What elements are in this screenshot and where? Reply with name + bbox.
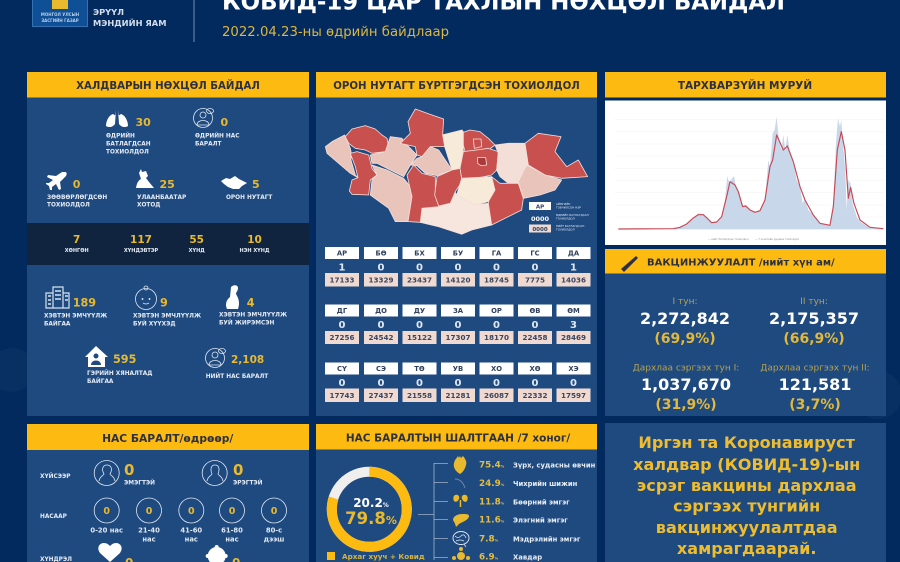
row: by age: 41-60 [180, 526, 202, 534]
cause: heart disease: 75.4% [479, 461, 505, 471]
province table row 3: ХӨ [529, 365, 541, 373]
province table row 1: 0 [416, 262, 423, 274]
stat: home monitored: 595 [113, 353, 136, 366]
stat: hospitalized children: ХЭВТЭН ЭМЧЛҮҮЛЖ [133, 314, 202, 320]
chart: epidemic curve [605, 100, 886, 245]
province table row 2: ОР [491, 307, 502, 315]
province table row 2: 0 [455, 320, 462, 331]
stat: hospitalized children: БУЙ ХҮҮХЭД [133, 319, 176, 327]
stat: daily deaths: ӨДРИЙН НАС [195, 132, 240, 140]
cause: heart disease [454, 456, 596, 474]
province table row 3: УВ [453, 365, 463, 373]
stat: Ulaanbaatar: ХОТОД [137, 202, 160, 208]
province table row 3: 21281 [445, 391, 471, 400]
province table row 3: 0 [339, 378, 346, 389]
map legend: ТОХИОЛДОЛ [555, 216, 575, 220]
stat: booster two [760, 364, 870, 413]
stat: imported cases: ТОХИОЛДОЛ [47, 202, 90, 208]
province table row 2: 0 [532, 320, 539, 331]
stat: Ulaanbaatar [136, 169, 187, 208]
stat: second dose: 2,175,357 [769, 309, 859, 328]
province table row 2: ӨМ [567, 307, 580, 315]
province table row 2: 28469 [561, 333, 586, 342]
map legend: ТОХИОЛДОЛ [555, 228, 575, 232]
province table row 2: 3 [570, 320, 577, 331]
cause: heart disease: Зүрх, судасны өвчин [513, 462, 596, 470]
ministry logo [32, 0, 194, 42]
province table row 2 [325, 304, 590, 344]
stat: second dose [769, 297, 859, 347]
province table row 2: ДУ [414, 307, 426, 315]
province table row 3: 26087 [484, 391, 509, 400]
panel: vaccination call to action: вакцинжуулалтдаа [656, 518, 838, 537]
map legend: АЙМГИЙН [556, 201, 570, 206]
stat: imported cases: 0 [73, 178, 81, 191]
cause: neurological disease: 7.8% [479, 534, 499, 544]
stat: booster one [633, 364, 739, 413]
province table row 1: 1 [339, 262, 346, 274]
province table row 2: 15122 [407, 333, 432, 342]
province table row 3: 0 [378, 378, 385, 389]
stat: daily deaths [194, 108, 240, 148]
heading: vaccination: ВАКЦИНЖУУЛАЛТ /нийт хүн ам/ [647, 258, 835, 268]
heading: causes of death [316, 424, 597, 450]
province table row 1: ГС [530, 250, 540, 258]
panel: daily deaths [27, 424, 309, 562]
province table row 1: ДА [568, 250, 580, 258]
row: by gender: ЭРЭГТЭЙ [233, 478, 263, 486]
stat: booster one: 1,037,670 [641, 375, 731, 394]
cause: liver disease [453, 514, 568, 527]
cause: kidney disease: 11.8% [479, 497, 505, 507]
cause: cancer: 6.9% [479, 552, 499, 562]
province table row 3: 21558 [407, 391, 432, 400]
map legend: АР [536, 204, 544, 210]
stat: daily confirmed cases [106, 110, 151, 155]
stat: hospitalized pregnant women: БУЙ ЖИРЭМСЭН [219, 318, 274, 326]
stat: booster one: (31,9%) [655, 397, 717, 413]
row: by age: 0 [229, 506, 236, 517]
severity strip: 7 [73, 234, 80, 246]
province table row 2: 0 [416, 320, 423, 331]
cause: kidney disease: Бөөрний эмгэг [513, 498, 570, 506]
stat: second dose: II тун: [800, 297, 828, 307]
stat: provinces: ОРОН НУТАГТ [226, 195, 272, 201]
cause: cancer: Хавдар [513, 553, 542, 561]
province table row 1 [325, 247, 590, 286]
panel: vaccination call to action: халдвар (КОВИД-19)-ын [633, 455, 860, 474]
map legend [529, 201, 589, 233]
stat: hospitalized: 189 [73, 297, 96, 310]
stat: total deaths: НИЙТ НАС БАРАЛТ [206, 372, 268, 380]
panel: vaccination call to action: Иргэн та Коронавируст [638, 433, 856, 452]
province table row 2: ӨВ [530, 307, 540, 315]
heading: epidemic curve: ТАРХВАРЗҮЙН МУРУЙ [678, 79, 812, 92]
severity strip: ХӨНГӨН [65, 248, 89, 254]
province table row 1: АР [337, 250, 347, 258]
ministry logo: МОНГОЛ УЛСЫН [41, 12, 79, 17]
map legend: НИЙТ БАТЛАГДСАН [556, 223, 584, 228]
province table row 1: БӨ [376, 250, 387, 258]
donut chart: 79.8% [345, 509, 397, 528]
row: by age: дээш [264, 536, 284, 544]
province table row 3: ХО [491, 365, 502, 373]
heading: causes of death: НАС БАРАЛТЫН ШАЛТГААН /7 хоног/ [346, 433, 570, 445]
cause: diabetes: Чихрийн шижин [513, 480, 578, 488]
stat: first dose: I тун: [672, 297, 698, 307]
heading: daily deaths: НАС БАРАЛТ/өдрөөр/ [102, 432, 233, 445]
province table row 2: ЗА [453, 307, 464, 315]
map legend: 0000 [531, 215, 550, 223]
donut legend: Архаг хууч + Ковид [342, 552, 425, 561]
icon: syringe [621, 256, 638, 272]
stat: booster two: (3,7%) [789, 397, 841, 413]
panel: vaccination [605, 249, 886, 416]
row: by gender: ХҮЙСЭЭР [40, 472, 71, 480]
stat: booster one: Дархлаа сэргээх тун I: [633, 364, 739, 374]
stat: booster two: Дархлаа сэргээх тун II: [760, 364, 870, 374]
severity strip: 55 [189, 234, 204, 246]
stat: daily confirmed cases: БАТЛАГДСАН [106, 142, 151, 148]
cause: cancer [452, 547, 542, 562]
severity strip: ХҮНД [189, 248, 205, 254]
ministry logo: ЗАСГИЙН ГАЗАР [41, 18, 79, 23]
stat: hospitalized pregnant women [219, 285, 288, 326]
row: by age: 0 [103, 506, 110, 517]
province table row 1: 14036 [561, 276, 586, 284]
map legend: ӨДРИЙН БАТЛАГДСАН [556, 212, 589, 217]
ministry logo: ЭРҮҮЛ [93, 7, 124, 17]
stat: Ulaanbaatar: УЛААНБААТАР [137, 195, 187, 201]
stat: home monitored [85, 346, 152, 385]
heading: vaccination [605, 249, 886, 274]
panel: vaccination call to action: эсрэг вакцины дархлаа [637, 476, 857, 495]
severity strip: 117 [130, 234, 152, 246]
province table row 2: 22458 [522, 333, 548, 342]
stat: booster two: 121,581 [779, 375, 851, 394]
row: by age: 0 [146, 506, 153, 517]
row: by gender [40, 460, 263, 486]
heading: local cases: ОРОН НУТАГТ БҮРТГЭГДСЭН ТОХИОЛДОЛ [333, 81, 580, 92]
row: by age [40, 498, 286, 544]
stat: imported cases [46, 172, 107, 208]
stat: total deaths [206, 348, 268, 380]
stat: hospitalized children: 9 [160, 297, 168, 310]
stat: home monitored: ГЭРИЙН ХЯНАЛТАД [87, 369, 152, 377]
map of provinces [325, 109, 588, 234]
heading: infection situation: ХАЛДВАРЫН НӨХЦӨЛ БАЙДАЛ [76, 79, 260, 92]
row: by age: 0 [188, 506, 195, 517]
stat: provinces: 5 [252, 178, 260, 191]
row: by complication [40, 543, 240, 562]
cause: liver disease: 11.6% [479, 516, 505, 526]
cause: liver disease: Элэгний эмгэг [513, 517, 568, 525]
stat: hospitalized: ХЭВТЭН ЭМЧҮҮЛЖ [44, 314, 108, 320]
province table row 3: 22332 [522, 391, 548, 400]
row: by age: нас [142, 536, 156, 544]
stat: daily confirmed cases: ӨДРИЙН [106, 132, 135, 140]
heading: local cases [316, 72, 597, 98]
cause: neurological disease: Мэдрэлийн эмгэг [513, 535, 581, 543]
province table row 1: 1 [570, 262, 577, 274]
row: by age: 0-20 нас [90, 526, 123, 534]
province table row 1: 14120 [445, 276, 471, 284]
cause: diabetes [455, 479, 578, 489]
province table row 2: 0 [378, 320, 385, 331]
stat: home monitored: БАЙГАА [87, 377, 114, 385]
province table row 2: 18170 [484, 333, 509, 342]
province table row 1: 0 [378, 262, 385, 274]
province table row 1: БХ [414, 250, 425, 258]
severity strip [27, 223, 309, 265]
stat: hospitalized children [133, 286, 202, 327]
province table row 3 [325, 362, 590, 402]
map legend: ТОВЧИЛСОН НЭР [555, 206, 581, 210]
heading: daily deaths [27, 424, 309, 450]
province table row 1: 0 [493, 262, 500, 274]
stat: hospitalized: БАЙГАА [44, 319, 71, 327]
heading: epidemic curve [605, 72, 886, 98]
province table row 3: 27437 [368, 391, 394, 400]
province table row 2: 17307 [445, 333, 471, 342]
province table row 3: 0 [570, 378, 577, 389]
province table row 3: СЭ [376, 365, 386, 373]
province table row 3: 17743 [329, 391, 355, 400]
province table row 2: ДО [375, 307, 387, 315]
province table row 3: 0 [493, 378, 500, 389]
cause: diabetes: 24.9% [479, 479, 505, 489]
province table row 2: 0 [339, 320, 346, 331]
province table row 1: 7775 [525, 276, 545, 284]
province table row 3: 0 [455, 378, 462, 389]
province table row 1: 0 [532, 262, 539, 274]
donut chart: 20.2% [353, 496, 389, 510]
province table row 2: 24542 [368, 333, 394, 342]
row: by gender: 0 [124, 461, 134, 479]
severity strip: ХҮНДЭВТЭР [124, 248, 159, 254]
province table row 1: 0 [455, 262, 462, 274]
row: by age: 61-80 [221, 526, 243, 534]
row: by gender: 0 [233, 461, 243, 479]
province table row 3: 0 [532, 378, 539, 389]
province table row 3: СҮ [337, 365, 347, 373]
province table row 1: 17133 [329, 276, 355, 284]
stat: Ulaanbaatar: 25 [160, 178, 175, 191]
stat: first dose: (69,9%) [654, 331, 716, 347]
row: by age: 21-40 [138, 526, 160, 534]
province table row 1: БУ [453, 250, 464, 258]
severity strip: 10 [247, 234, 262, 246]
row: by age: 0 [271, 506, 278, 517]
cause: kidney disease [453, 495, 570, 507]
province table row 1: 18745 [484, 276, 509, 284]
stat: first dose: 2,272,842 [640, 309, 730, 328]
panel: causes of death [316, 424, 597, 562]
panel: infection situation [27, 72, 309, 416]
stat: hospitalized [44, 287, 108, 327]
chart: epidemic curve: — 7 хоногийн дундаж тохиолдол [755, 237, 799, 241]
stat: daily confirmed cases: ТОХИОЛДОЛ [106, 149, 149, 155]
row: by gender: ЭМЭГТЭЙ [124, 478, 155, 486]
chart: epidemic curve: — нийт батлагдсан тохиолдол [708, 237, 749, 241]
stat: daily confirmed cases: 30 [136, 116, 151, 129]
row: by age: нас [225, 536, 239, 544]
province table row 1: ГА [492, 250, 502, 258]
province table row 1: 13329 [368, 276, 394, 284]
stat: imported cases: ЗӨӨВӨРЛӨГДСӨН [47, 195, 107, 201]
stat: daily deaths: 0 [220, 116, 228, 129]
province table row 1: 23437 [407, 276, 432, 284]
panel: vaccination call to action: хамрагдаарай. [677, 539, 817, 558]
row: by age: нас [185, 536, 198, 544]
stat: hospitalized pregnant women: ХЭВТЭН ЭМЧЛҮҮЛЖ [219, 313, 288, 319]
province table row 2: 0 [493, 320, 500, 331]
panel: vaccination call to action: сэргээх тунгийн [673, 496, 820, 516]
row: by age: НАСААР [40, 514, 68, 520]
stat: second dose: (66,9%) [783, 331, 845, 347]
province table row 3: ТӨ [414, 365, 425, 373]
connector lines [418, 463, 448, 560]
stat: daily deaths: БАРАЛТ [195, 142, 221, 148]
map legend: 0000 [532, 227, 548, 233]
date subtitle: 2022.04.23-ны өдрийн байдлаар [222, 24, 449, 40]
severity strip: НЭН ХҮНД [240, 248, 270, 254]
province table row 2: 27256 [329, 333, 355, 342]
cause: neurological disease [453, 532, 581, 547]
stat: total deaths: 2,108 [231, 354, 264, 366]
province table row 3: 0 [416, 378, 423, 389]
province table row 3: 17597 [561, 391, 586, 400]
ministry logo: МЭНДИЙН ЯАМ [93, 17, 166, 28]
row: by age: 80-с [266, 526, 282, 534]
stat: hospitalized pregnant women: 4 [247, 297, 255, 310]
heading: infection situation [27, 72, 309, 98]
province table row 2: ДГ [337, 307, 348, 315]
panel: local cases [316, 72, 597, 416]
stat: first dose [640, 297, 730, 347]
stat: provinces [221, 176, 272, 201]
province table row 3: ХЭ [568, 365, 579, 373]
donut chart [332, 472, 407, 547]
panel: vaccination call to action [605, 423, 886, 562]
